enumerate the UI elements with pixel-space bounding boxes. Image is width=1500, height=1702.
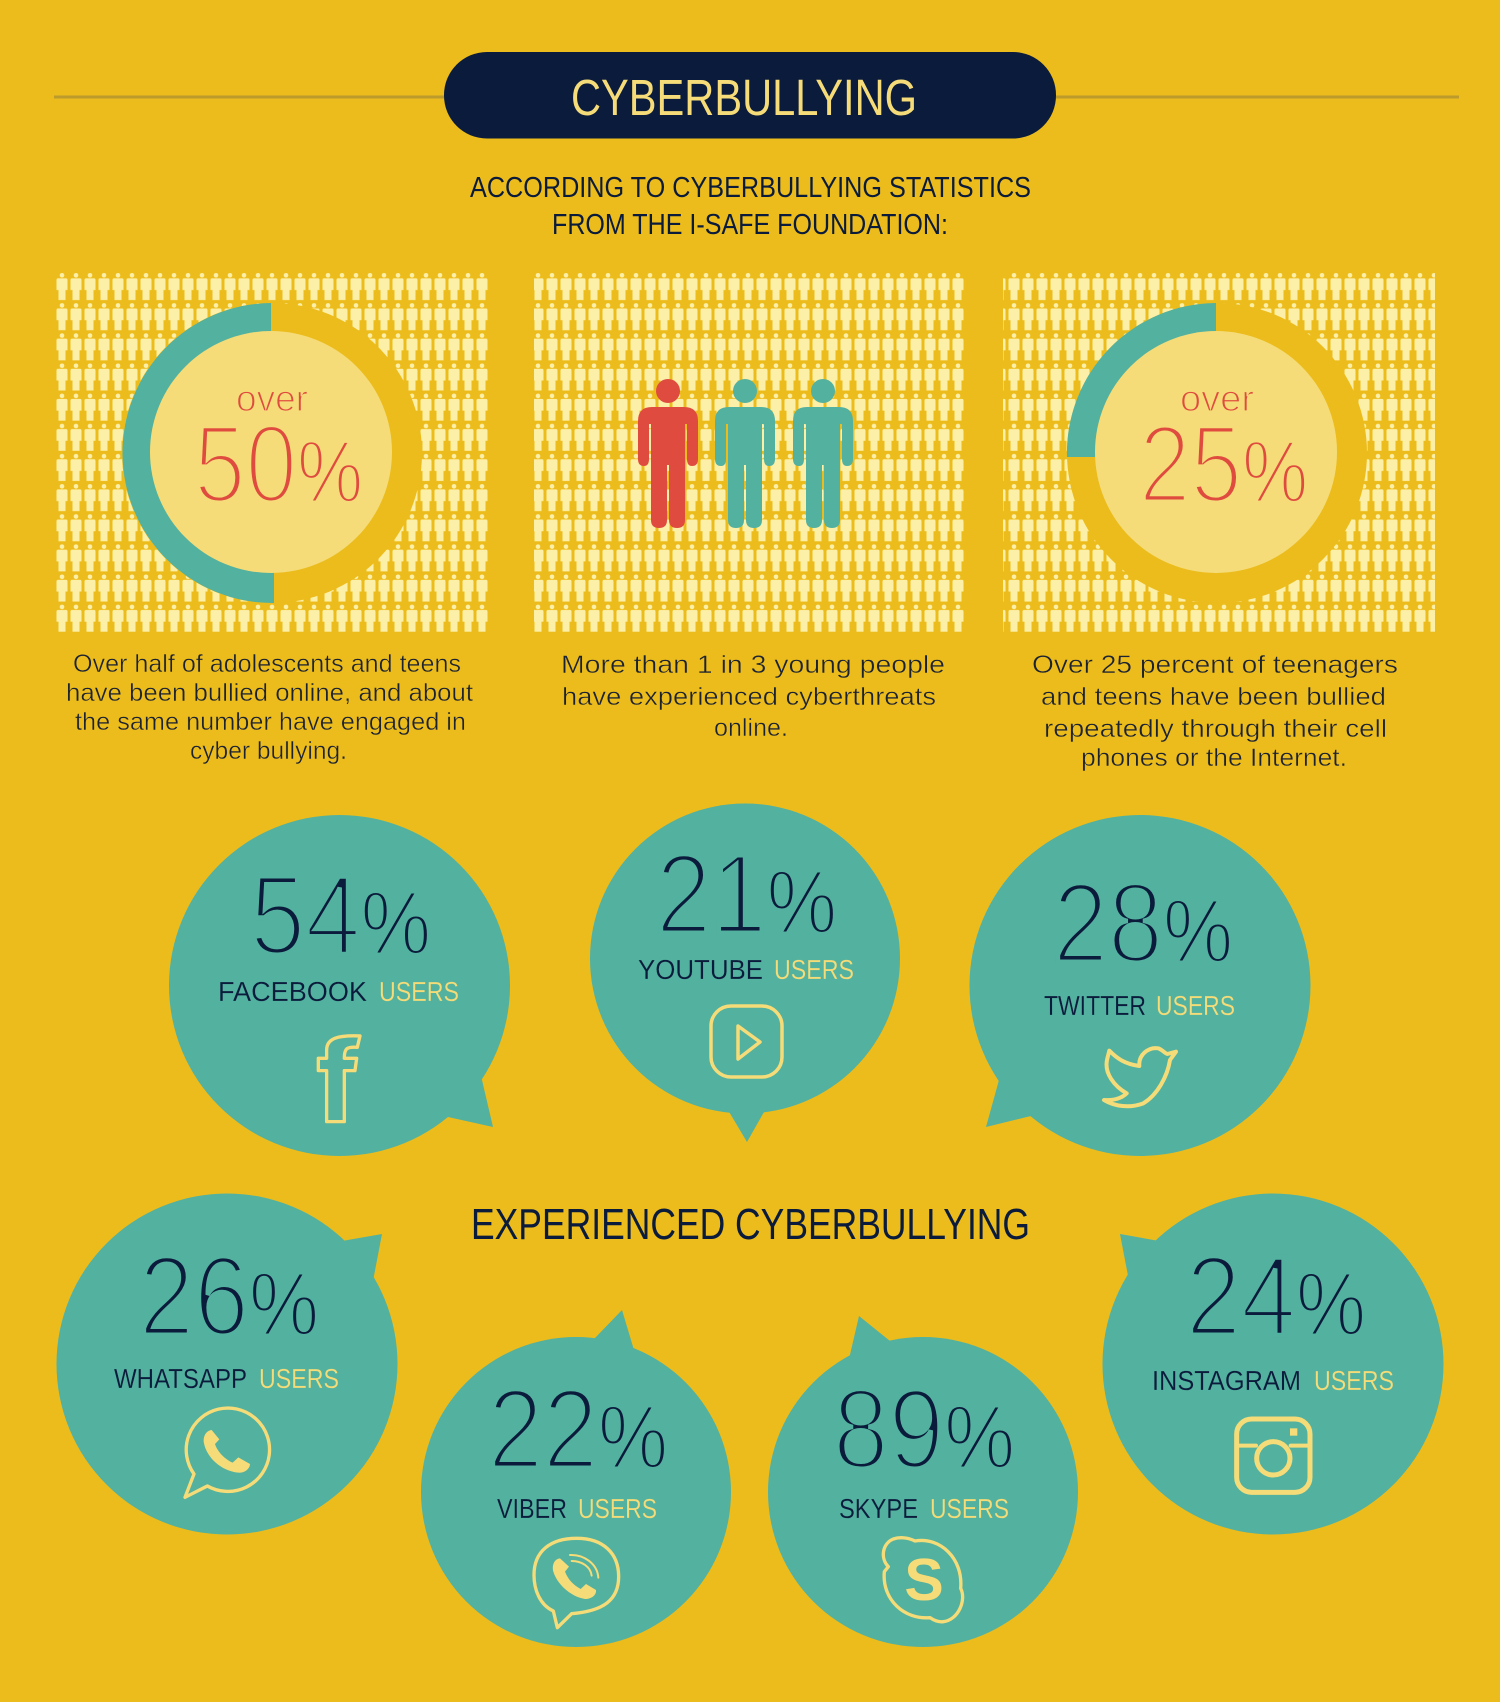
icon: twitter bird xyxy=(1104,1048,1176,1106)
panel caption: over half xyxy=(66,650,473,765)
panel caption: 1 in 3 xyxy=(561,651,945,742)
number: 50%: 50% xyxy=(194,403,363,526)
panel caption: 1 in 3: have experienced cyberthreats xyxy=(562,683,936,711)
label: twitter users xyxy=(1044,990,1235,1021)
panel caption: over 25 percent: Over 25 percent of teenagers xyxy=(1032,651,1398,679)
label: viber users: USERS xyxy=(578,1493,657,1524)
donut: centre disc xyxy=(150,331,392,573)
number: 25%: 25% xyxy=(1139,403,1308,526)
label: facebook users: FACEBOOK xyxy=(218,976,367,1007)
icon: facebook f xyxy=(318,1036,360,1122)
intro text: FROM THE I-SAFE FOUNDATION: xyxy=(552,209,948,241)
label: instagram users: USERS xyxy=(1314,1365,1394,1396)
bubble: whatsapp xyxy=(56,1194,398,1534)
panel caption: over 25 percent: phones or the Internet. xyxy=(1081,744,1347,772)
label: instagram users: INSTAGRAM xyxy=(1152,1365,1301,1396)
bubble: twitter xyxy=(970,815,1310,1156)
icon: play button xyxy=(711,1006,782,1077)
bubble: youtube xyxy=(590,804,900,1142)
panel caption: over 25 percent xyxy=(1032,651,1398,772)
label: youtube users xyxy=(638,954,854,985)
panel caption: over 25 percent: repeatedly through their cell xyxy=(1044,715,1387,743)
number: 54%: 54% xyxy=(250,852,431,978)
intro text: ACCORDING TO CYBERBULLYING STATISTICS xyxy=(470,172,1031,204)
panel: 1 in 3 people xyxy=(534,273,966,632)
heading: experienced cyberbullying: EXPERIENCED CYBERBULLYING xyxy=(471,1200,1030,1249)
panel caption: 1 in 3: online. xyxy=(714,714,788,742)
label: over: over xyxy=(236,378,308,419)
title pill xyxy=(444,52,1056,138)
label: instagram users xyxy=(1152,1365,1394,1396)
label: skype users: USERS xyxy=(930,1493,1009,1524)
label: skype users: SKYPE xyxy=(839,1493,918,1524)
bubble: instagram xyxy=(1102,1194,1444,1534)
label: viber users xyxy=(497,1493,657,1524)
label: skype users xyxy=(839,1493,1009,1524)
icon: skype xyxy=(883,1538,963,1622)
panel caption: over half: have been bullied online, and about xyxy=(66,679,473,707)
panel: over 50% xyxy=(56,273,488,632)
panel caption: over 25 percent: and teens have been bullied xyxy=(1041,683,1386,711)
label: whatsapp users xyxy=(114,1363,339,1394)
panel caption: over half: cyber bullying. xyxy=(190,737,347,765)
bubble: skype xyxy=(768,1316,1078,1647)
number: 89%: 89% xyxy=(833,1366,1015,1492)
panel caption: over half: Over half of adolescents and teens xyxy=(73,650,461,678)
person: teal 2 xyxy=(793,379,853,528)
intro text xyxy=(470,172,1031,241)
number: 26%: 26% xyxy=(139,1233,319,1359)
person: red xyxy=(638,379,698,528)
label: whatsapp users: WHATSAPP xyxy=(114,1363,247,1394)
icon: skype: S xyxy=(904,1547,944,1613)
icon: whatsapp xyxy=(185,1408,270,1497)
donut: teal half xyxy=(122,303,274,603)
label: whatsapp users: USERS xyxy=(259,1363,339,1394)
number: 21%: 21% xyxy=(656,831,837,957)
title pill: CYBERBULLYING xyxy=(571,69,917,126)
label: twitter users: USERS xyxy=(1156,990,1235,1021)
label: facebook users: USERS xyxy=(379,976,459,1007)
bubble: facebook xyxy=(169,815,510,1156)
icon: viber xyxy=(534,1538,619,1628)
label: viber users: VIBER xyxy=(497,1493,567,1524)
label: facebook users xyxy=(218,976,459,1007)
number: 24%: 24% xyxy=(1186,1233,1366,1359)
donut: centre disc xyxy=(1095,331,1337,573)
label: youtube users: YOUTUBE xyxy=(638,954,763,985)
number: 28%: 28% xyxy=(1053,860,1233,986)
panel: over 25% xyxy=(1003,273,1435,632)
donut: teal quarter xyxy=(1067,303,1216,457)
label: over: over xyxy=(1180,378,1254,419)
panel caption: 1 in 3: More than 1 in 3 young people xyxy=(561,651,945,679)
bubble: viber xyxy=(421,1310,731,1647)
number: 22%: 22% xyxy=(488,1366,668,1492)
label: youtube users: USERS xyxy=(774,954,854,985)
person: teal 1 xyxy=(715,379,775,528)
panel caption: over half: the same number have engaged in xyxy=(75,708,466,736)
label: twitter users: TWITTER xyxy=(1044,990,1146,1021)
icon: instagram xyxy=(1237,1419,1310,1492)
